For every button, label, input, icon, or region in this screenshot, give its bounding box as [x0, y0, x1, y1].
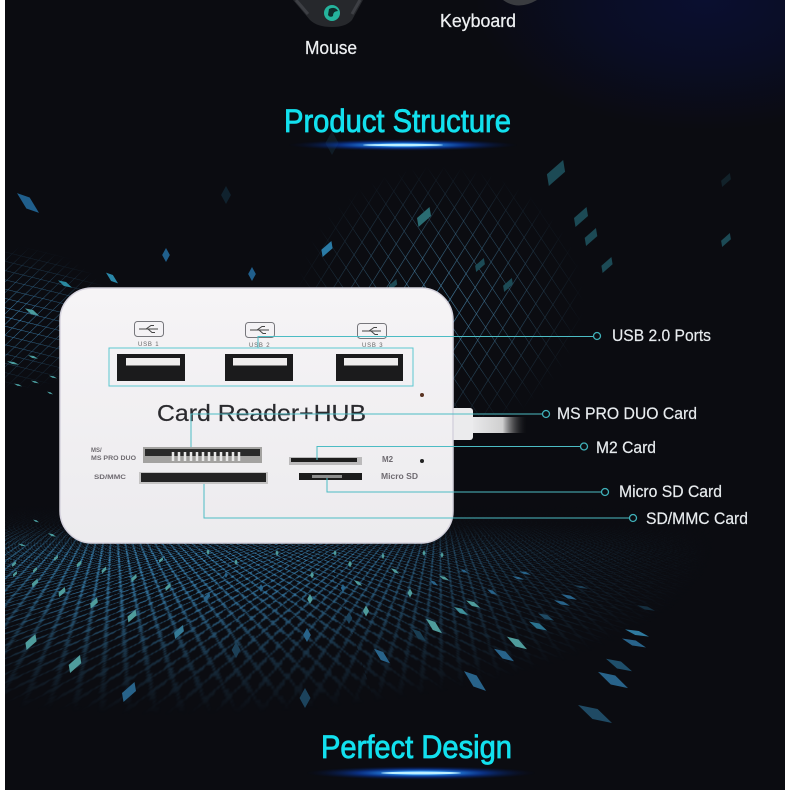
- callout: USB 2.0 Ports: USB 2.0 Ports: [612, 326, 711, 345]
- background grid: left edge: [5, 250, 96, 386]
- USB icons and labels: [134, 322, 386, 349]
- title underline glow: [288, 139, 518, 151]
- background grid: upper centre: [304, 172, 578, 417]
- callout: USB 2.0 Ports: [109, 326, 711, 386]
- callout: SD/MMC Card: [204, 484, 748, 528]
- slot labels: Micro SD: [381, 472, 418, 481]
- slot labels: [91, 448, 418, 481]
- callout: M2 Card: [317, 438, 656, 460]
- callout: Micro SD Card: [327, 478, 722, 501]
- USB icons and labels: USB 3: [362, 343, 383, 349]
- callout: M2 Card: M2 Card: [596, 438, 656, 457]
- callout: MS PRO DUO Card: [191, 404, 697, 447]
- indicator lights: [420, 393, 424, 463]
- slot labels: MS PRO DUO: [91, 456, 136, 462]
- icon: mouse: [293, 0, 363, 27]
- USB icons and labels: USB 1: [138, 342, 159, 348]
- title underline glow: [306, 766, 536, 780]
- slot labels: M2: [382, 455, 394, 464]
- icon: keyboard fragment: [503, 0, 537, 6]
- slot labels: SD/MMC: [94, 474, 126, 481]
- title: Product Structure: Product Structure: [284, 103, 511, 139]
- USB ports: [117, 354, 403, 381]
- slot labels: MS/: [91, 448, 102, 454]
- label: Mouse: Mouse: [305, 38, 357, 58]
- panel: card reader hub device: [60, 288, 453, 543]
- title: Perfect Design: Perfect Design: [321, 729, 512, 765]
- callout: Micro SD Card: Micro SD Card: [619, 482, 722, 501]
- floating diamonds: [7, 131, 731, 723]
- label: Keyboard: Keyboard: [440, 11, 516, 31]
- callout: SD/MMC Card: SD/MMC Card: [646, 509, 748, 528]
- card slots: [139, 447, 362, 484]
- cable: [450, 408, 527, 440]
- callout: MS PRO DUO Card: MS PRO DUO Card: [557, 404, 697, 423]
- device name: Card Reader+HUB: [157, 400, 366, 426]
- USB icons and labels: USB 2: [249, 343, 270, 349]
